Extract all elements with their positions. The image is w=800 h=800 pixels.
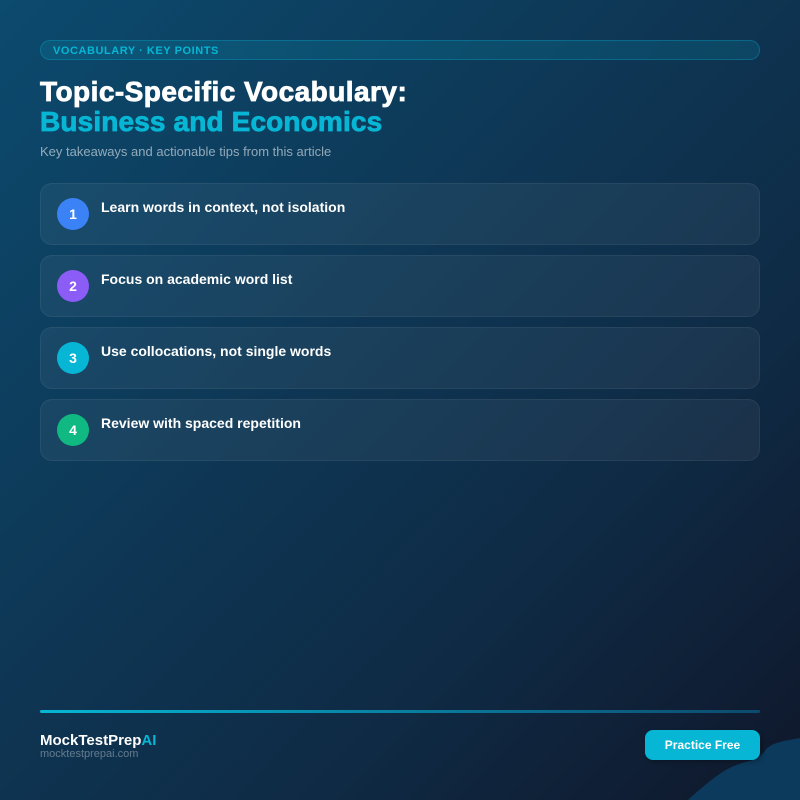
call to action button [645,730,760,760]
number badge 4 [57,414,89,446]
subtitle: Key takeaways and actionable tips from this article [40,144,331,159]
eyebrow tag: VOCABULARY · KEY POINTS [53,45,219,57]
call to action button: Practice Free [665,738,740,752]
number badge 1: 1 [69,206,77,222]
point 2 card [40,255,760,317]
title [40,76,407,137]
number badge 3: 3 [69,350,77,366]
point 1 text: Learn words in context, not isolation [101,199,345,215]
number badge 3 [57,342,89,374]
eyebrow tag [40,40,760,60]
number badge 2 [57,270,89,302]
number badge 4: 4 [69,422,77,438]
point 1 card [40,183,760,245]
point 4 card [40,399,760,461]
point 4 text: Review with spaced repetition [101,415,301,431]
footer accent line [40,710,760,713]
point 3 card [40,327,760,389]
number badge 1 [57,198,89,230]
title: Topic-Specific Vocabulary: [40,76,407,107]
title: Business and Economics [40,106,382,137]
point 3 text: Use collocations, not single words [101,343,331,359]
point 2 text: Focus on academic word list [101,271,292,287]
number badge 2: 2 [69,278,77,294]
brand name: MockTestPrepAI [40,732,156,749]
decorative corner shape [688,738,800,800]
brand url: mocktestprepai.com [40,748,138,760]
